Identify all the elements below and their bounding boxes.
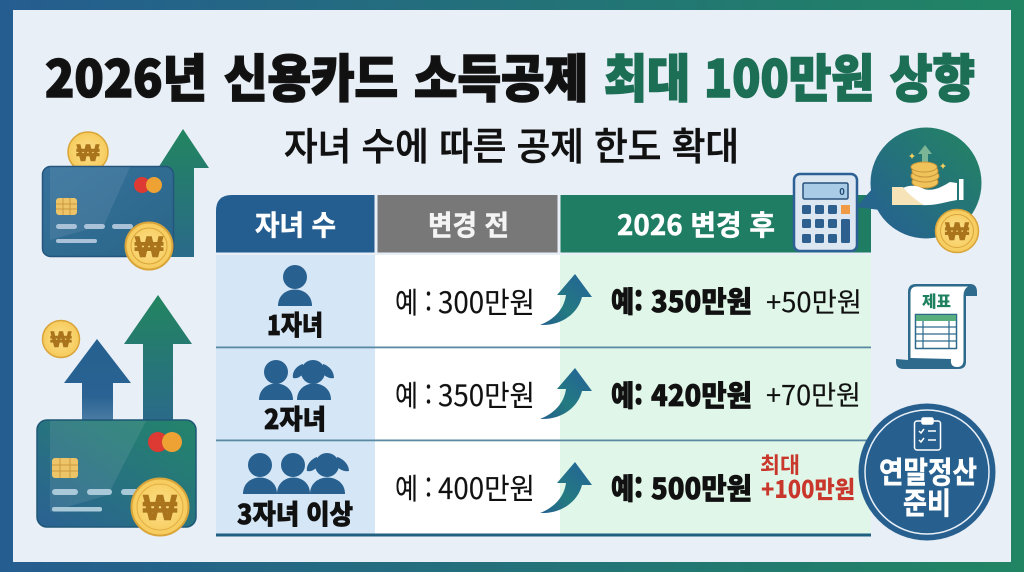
row 2: two children: 예: <box>611 373 643 415</box>
icon: calculator <box>794 174 857 251</box>
icon: two children <box>259 360 334 400</box>
row 3: three or more children: 400만원 <box>438 466 535 508</box>
icon: tax statement document: 제표 <box>922 288 951 312</box>
row 1: one child: 예: <box>611 279 643 321</box>
row 2: two children: 420만원 <box>651 373 752 415</box>
row 1: one child: +50만원 <box>766 281 862 320</box>
illustration: card with two rising arrows <box>37 295 196 536</box>
row 2: two children <box>259 360 861 437</box>
row 1: one child: 350만원 <box>651 279 752 321</box>
callout: maximum increase: 최대 <box>760 448 800 480</box>
row 3: three or more children: 3자녀 이상 <box>237 493 353 532</box>
icon: three children <box>243 453 349 494</box>
row 2: two children: 예 : <box>395 373 432 415</box>
badge: year-end settlement: 준비 <box>903 479 951 523</box>
table <box>216 195 871 536</box>
row 1: one child: 300만원 <box>438 280 535 322</box>
title: 소득공제 <box>414 38 588 112</box>
row dividers <box>216 346 871 536</box>
icon: money in hand bubble: ₩ <box>945 218 969 246</box>
row 1: one child: 1자녀 <box>267 304 323 343</box>
row 2: two children: 2자녀 <box>264 398 326 437</box>
badge: year-end settlement: 연말정산 <box>879 448 977 492</box>
title: 상향 <box>890 38 975 112</box>
column backgrounds <box>216 255 871 535</box>
row 2: two children: 350만원 <box>438 373 535 415</box>
badge: year-end settlement <box>858 404 996 540</box>
illustration: credit card with coins and arrow: ₩ <box>135 231 164 264</box>
coins stack <box>911 162 939 188</box>
title: 신용카드 <box>224 38 398 112</box>
hand <box>903 182 957 205</box>
title: 100만원 <box>704 38 874 112</box>
sparkles <box>909 153 946 169</box>
icon: tax statement document <box>896 284 977 369</box>
icon: clipboard checklist <box>914 418 940 450</box>
callout: maximum increase <box>760 448 855 505</box>
header: before change: 변경 전 <box>428 204 509 244</box>
row 3: three or more children: 예: <box>611 466 643 508</box>
icon: one child <box>278 265 312 306</box>
icon: money in hand bubble <box>856 128 982 252</box>
row 3: three or more children: 500만원 <box>651 466 752 508</box>
header: after 2026 change <box>560 195 871 252</box>
row 2: two children: +70만원 <box>766 374 861 413</box>
row 3: three or more children: 예 : <box>395 466 432 508</box>
header: children count: 자녀 수 <box>255 204 336 244</box>
illustration: credit card with coins and arrow <box>42 129 209 270</box>
illustration: card with two rising arrows: ₩ <box>143 487 177 528</box>
arrow <box>540 368 592 419</box>
row 1: one child <box>267 265 862 343</box>
title <box>45 38 975 112</box>
row 1: one child: 예 : <box>395 280 432 322</box>
header: before change <box>378 195 558 252</box>
title: 최대 <box>604 38 690 112</box>
icon: calculator: 0 <box>839 187 845 198</box>
arrow <box>540 274 592 325</box>
header: after 2026 change: 2026 변경 후 <box>617 204 775 244</box>
illustration: card with two rising arrows: ₩ <box>51 327 72 352</box>
coin <box>936 210 978 252</box>
arrow up <box>918 145 932 163</box>
title: 2026년 <box>45 38 207 112</box>
illustration: credit card with coins and arrow: ₩ <box>77 140 100 167</box>
row 3: three or more children <box>237 448 855 532</box>
header: children count <box>216 195 374 252</box>
callout: maximum increase: +100만원 <box>761 470 855 505</box>
arrow <box>540 462 592 513</box>
subtitle: 자녀 수에 따른 공제 한도 확대 <box>284 116 739 171</box>
